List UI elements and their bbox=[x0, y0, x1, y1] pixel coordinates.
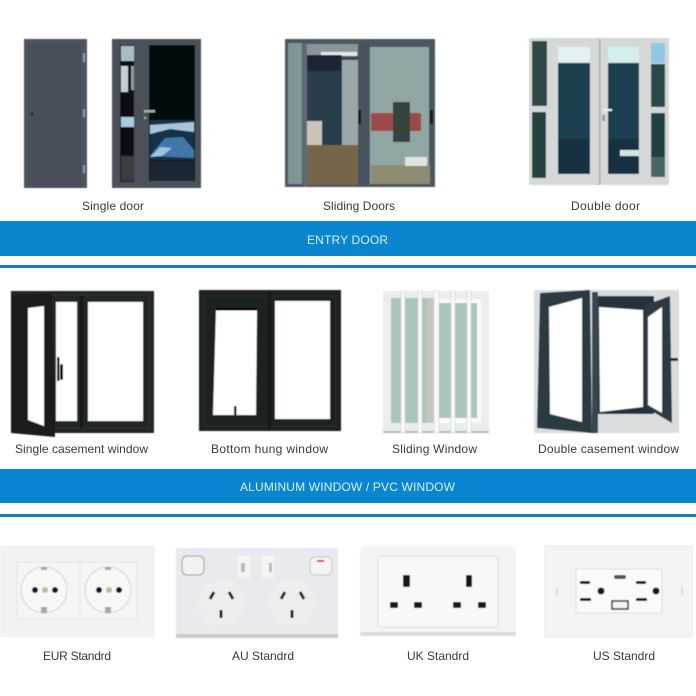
icon: double door bbox=[529, 38, 669, 185]
label: UK Standrd: UK Standrd bbox=[407, 649, 469, 663]
label: Double casement window: Double casement window bbox=[538, 442, 679, 456]
label: Single door: Single door bbox=[82, 199, 144, 213]
banner: aluminum window / PVC window: ALUMINUM WINDOW / PVC WINDOW bbox=[240, 480, 456, 494]
banner: entry door: ENTRY DOOR bbox=[307, 233, 388, 247]
label: US Standrd: US Standrd bbox=[593, 649, 655, 663]
label: EUR Standrd: EUR Standrd bbox=[43, 649, 111, 663]
icon: single casement window bbox=[11, 291, 154, 437]
icon: AU socket bbox=[176, 548, 338, 638]
icon: double casement window bbox=[534, 290, 679, 433]
banner: entry door bbox=[0, 221, 696, 256]
icon: UK socket bbox=[360, 546, 516, 636]
icon: US socket bbox=[545, 546, 692, 637]
banner: aluminum window / PVC window bbox=[0, 469, 696, 503]
icon: bottom hung window bbox=[199, 290, 341, 431]
icon: sliding doors bbox=[285, 39, 435, 187]
label: Bottom hung window: Bottom hung window bbox=[211, 442, 328, 456]
icon: glass door with sidelight bbox=[112, 39, 201, 188]
icon: sliding window bbox=[383, 291, 489, 433]
icon: single solid door bbox=[24, 39, 87, 188]
icon: EUR socket bbox=[0, 546, 155, 637]
label: Double door: Double door bbox=[571, 199, 640, 213]
label: Sliding Doors: Sliding Doors bbox=[323, 199, 395, 213]
label: Single casement window: Single casement window bbox=[15, 442, 148, 456]
label: Sliding Window: Sliding Window bbox=[392, 442, 477, 456]
label: AU Standrd: AU Standrd bbox=[232, 649, 294, 663]
